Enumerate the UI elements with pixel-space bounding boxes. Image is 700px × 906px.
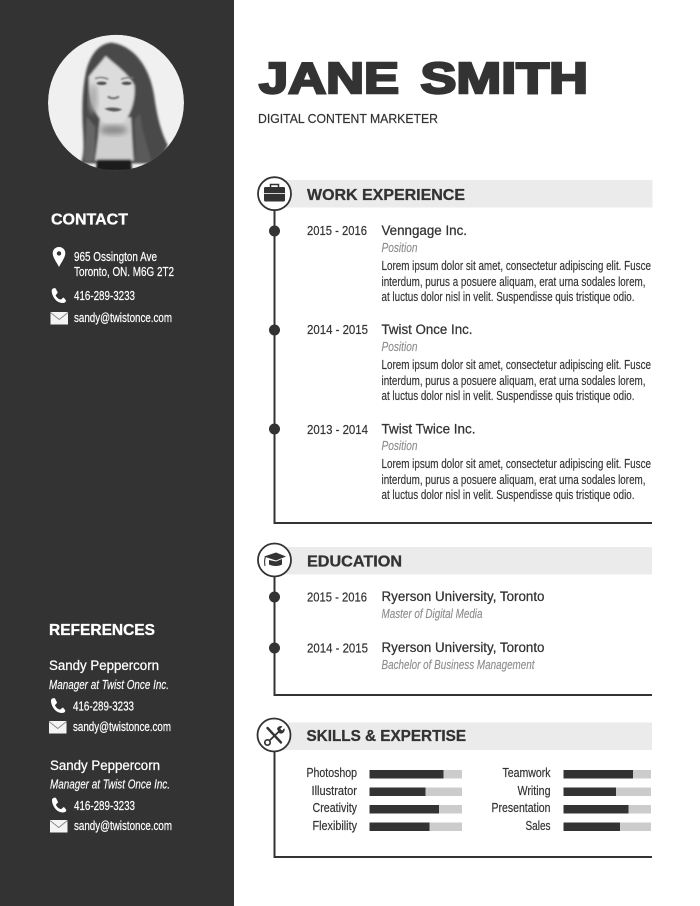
- address: Toronto, ON. M6G 2T2: [74, 265, 174, 279]
- bar chart: left skills: Creativity: [312, 800, 357, 815]
- contact heading: CONTACT: [51, 212, 129, 228]
- entry: bachelor: Bachelor of Business Management: [382, 658, 535, 672]
- subtitle: job title: DIGITAL CONTENT MARKETER: [258, 112, 438, 126]
- entry: master: 2015 - 2016: [307, 590, 367, 604]
- reference 1: Manager at Twist Once Inc.: [49, 678, 169, 692]
- entry: bachelor: Ryerson University, Toronto: [382, 640, 544, 655]
- panel: skills: [258, 718, 652, 857]
- reference 1: 416-289-3233: [73, 700, 134, 714]
- address: 965 Ossington Ave: [74, 250, 157, 264]
- entry: bachelor: [269, 640, 544, 672]
- entry: bachelor: 2014 - 2015: [307, 640, 368, 656]
- hair mass: [81, 43, 168, 163]
- bar chart: left skills: [306, 765, 462, 833]
- icon: map pin: [53, 247, 65, 267]
- reference 2: sandy@twistonce.com: [74, 819, 172, 833]
- entry: Twist Once: 2014 - 2015: [307, 322, 368, 337]
- section bar: [275, 180, 652, 208]
- phone number: 416-289-3233: [74, 289, 135, 303]
- entry: Twist Twice: Twist Twice Inc.: [382, 422, 476, 436]
- address: [74, 250, 174, 279]
- face: [89, 56, 135, 126]
- icon: tools: [258, 718, 290, 752]
- bar chart: right skills: Presentation: [492, 800, 550, 815]
- entry: Venngage: [269, 223, 651, 304]
- email: sandy@twistonce.com: [74, 311, 172, 325]
- icon: graduation cap: [258, 544, 291, 576]
- bar chart: right skills: Teamwork: [502, 765, 551, 780]
- reference 2: Manager at Twist Once Inc.: [50, 778, 170, 792]
- reference 2: [50, 758, 172, 833]
- entry: Twist Once: Twist Once Inc.: [382, 322, 472, 337]
- neck shadow: [99, 125, 127, 135]
- sidebar background: [0, 0, 234, 906]
- entry: Twist Once: at luctus dolor nisl in velit. Suspendisse quis tristique odio.: [382, 389, 634, 403]
- entry: Twist Once: [269, 322, 651, 403]
- reference 1: Sandy Peppercorn: [49, 658, 159, 673]
- title: name: SMITH: [420, 54, 588, 103]
- entry: Venngage: Position: [382, 241, 418, 255]
- heading: SKILLS & EXPERTISE: [306, 728, 466, 745]
- entry: Twist Twice: at luctus dolor nisl in velit. Suspendisse quis tristique odio.: [382, 488, 634, 502]
- reference 1: sandy@twistonce.com: [73, 720, 171, 734]
- section bar: [275, 722, 652, 750]
- icon: phone: [52, 288, 66, 303]
- panel: work experience: [258, 177, 652, 523]
- panel: education: [258, 544, 652, 695]
- title: name: [259, 54, 588, 103]
- entry: master: Ryerson University, Toronto: [382, 589, 544, 604]
- icon: briefcase: [258, 177, 291, 210]
- bar chart: right skills: Sales: [526, 818, 551, 833]
- reference 2: 416-289-3233: [74, 799, 135, 813]
- contact details: [50, 247, 174, 325]
- entry: Twist Twice: Position: [382, 439, 418, 453]
- bar chart: left skills: Illustrator: [312, 783, 358, 798]
- neck: [95, 117, 134, 161]
- heading: WORK EXPERIENCE: [307, 187, 465, 204]
- entry: Twist Twice: 2013 - 2014: [307, 422, 368, 437]
- side locks: [134, 113, 152, 162]
- bar chart: left skills: Photoshop: [306, 765, 357, 780]
- timeline: [274, 751, 652, 857]
- entry: master: Master of Digital Media: [382, 607, 483, 621]
- heading: EDUCATION: [307, 554, 402, 570]
- section bar: [275, 547, 652, 574]
- references heading: REFERENCES: [49, 622, 155, 639]
- timeline: [274, 210, 652, 523]
- profile photo: [48, 35, 184, 172]
- entry: Twist Once: Position: [382, 340, 418, 354]
- bar chart: right skills: Writing: [518, 783, 550, 798]
- entry: Venngage: at luctus dolor nisl in velit. Suspendisse quis tristique odio.: [382, 290, 634, 304]
- entry: Venngage: 2015 - 2016: [307, 223, 367, 238]
- icon: envelope: [50, 312, 68, 324]
- title: name: JANE: [259, 54, 399, 103]
- entry: Venngage: Venngage Inc.: [382, 223, 467, 238]
- timeline: [274, 575, 652, 695]
- reference 1: [49, 658, 171, 734]
- facial features: [95, 77, 134, 112]
- bar chart: left skills: Flexibility: [312, 818, 357, 833]
- shirt: [96, 159, 132, 172]
- bar chart: right skills: [492, 765, 651, 833]
- entry: master: [269, 589, 544, 621]
- entry: Twist Twice: [269, 422, 651, 502]
- reference 2: Sandy Peppercorn: [50, 758, 160, 773]
- face shadow: [90, 83, 97, 113]
